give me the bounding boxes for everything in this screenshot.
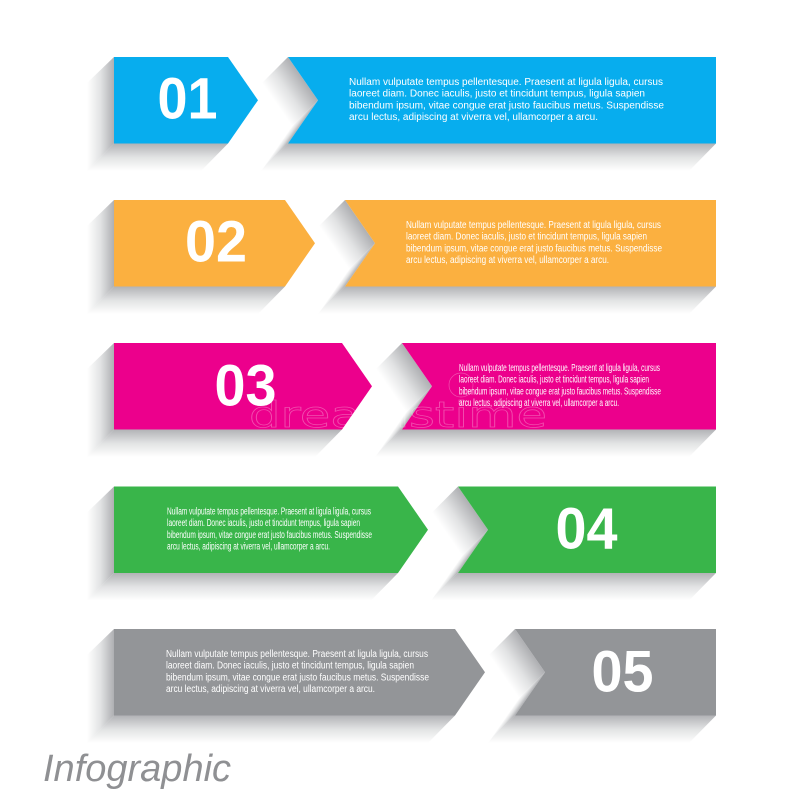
right bar shadow [488,716,716,743]
left arrow shadow [87,629,455,743]
text block: bibendum ipsum, vitae congue erat justo faucibus metus. Suspendisse [167,530,372,541]
panel: row 03 [87,343,716,457]
arrow: number block [114,57,258,144]
arrow: text block background [114,486,428,573]
panel: row 05 [87,629,716,743]
arrow: text block background [114,629,485,716]
panel: row 01 [87,57,716,171]
watermark [249,373,547,436]
number 05: 05 [592,640,654,704]
bar: number block [458,486,716,573]
text block: laoreet diam. Donec iaculis, justo et tincidunt tempus, ligula sapien [166,660,414,672]
text block: bibendum ipsum, vitae congue erat justo faucibus metus. Suspendisse [349,100,664,112]
left arrow shadow [87,200,285,314]
number 04: 04 [556,496,618,562]
chevron notch shadow [262,57,318,170]
text block [406,220,662,266]
text block: bibendum ipsum, vitae congue erat justo faucibus metus. Suspendisse [406,244,662,254]
number 01: 01 [158,66,218,132]
text block [166,649,429,695]
text block [349,77,664,123]
text block: arcu lectus, adipiscing at viverra vel, ullamcorper a arcu. [349,112,598,123]
text block: Nullam vulputate tempus pellentesque. Praesent at ligula ligula, cursus [459,363,660,374]
right bar shadow [431,573,716,600]
text block: laoreet diam. Donec iaculis, justo et tincidunt tempus, ligula sapien [459,374,649,386]
bar: text block background [345,200,716,286]
bar: text block background [402,343,716,430]
number 03: 03 [214,354,276,418]
text block: Nullam vulputate tempus pellentesque. Praesent at ligula ligula, cursus [166,649,428,660]
left arrow shadow [87,57,228,171]
bar: text block background [288,57,716,144]
bar: number block [515,629,716,716]
text block [459,363,661,409]
text block: arcu lectus, adipiscing at viverra vel, ullamcorper a arcu. [459,398,619,409]
text block: bibendum ipsum, vitae congue erat justo faucibus metus. Suspendisse [166,672,429,684]
text block: laoreet diam. Donec iaculis, justo et tincidunt tempus, ligula sapien [349,88,645,100]
text block [167,506,372,552]
watermark: dreamstime [249,395,547,436]
text block: arcu lectus, adipiscing at viverra vel, ullamcorper a arcu. [167,542,330,552]
text block: Nullam vulputate tempus pellentesque. Praesent at ligula ligula, cursus [167,506,371,518]
text block: Nullam vulputate tempus pellentesque. Praesent at ligula ligula, cursus [349,77,663,88]
right bar shadow [261,144,716,171]
left arrow shadow [87,343,342,457]
chevron notch shadow [489,629,545,742]
panel: row 02 [87,200,716,314]
panel: row 04 [87,486,716,600]
chevron notch shadow [376,343,432,456]
title: Infographic [43,748,231,790]
text block: laoreet diam. Donec iaculis, justo et tincidunt tempus, ligula sapien [167,518,360,529]
arrow: number block [114,343,372,430]
text block: arcu lectus, adipiscing at viverra vel, ullamcorper a arcu. [166,684,375,695]
chevron notch shadow [319,200,375,313]
arrow: number block [114,200,315,286]
chevron notch shadow [432,486,488,600]
right bar shadow [375,430,716,457]
right bar shadow [318,286,716,314]
text block: laoreet diam. Donec iaculis, justo et tincidunt tempus, ligula sapien [406,232,647,242]
text block: arcu lectus, adipiscing at viverra vel, ullamcorper a arcu. [406,255,609,266]
text block: Nullam vulputate tempus pellentesque. Praesent at ligula ligula, cursus [406,220,661,231]
number 02: 02 [185,210,247,274]
left arrow shadow [87,486,398,600]
text block: bibendum ipsum, vitae congue erat justo faucibus metus. Suspendisse [459,386,661,398]
